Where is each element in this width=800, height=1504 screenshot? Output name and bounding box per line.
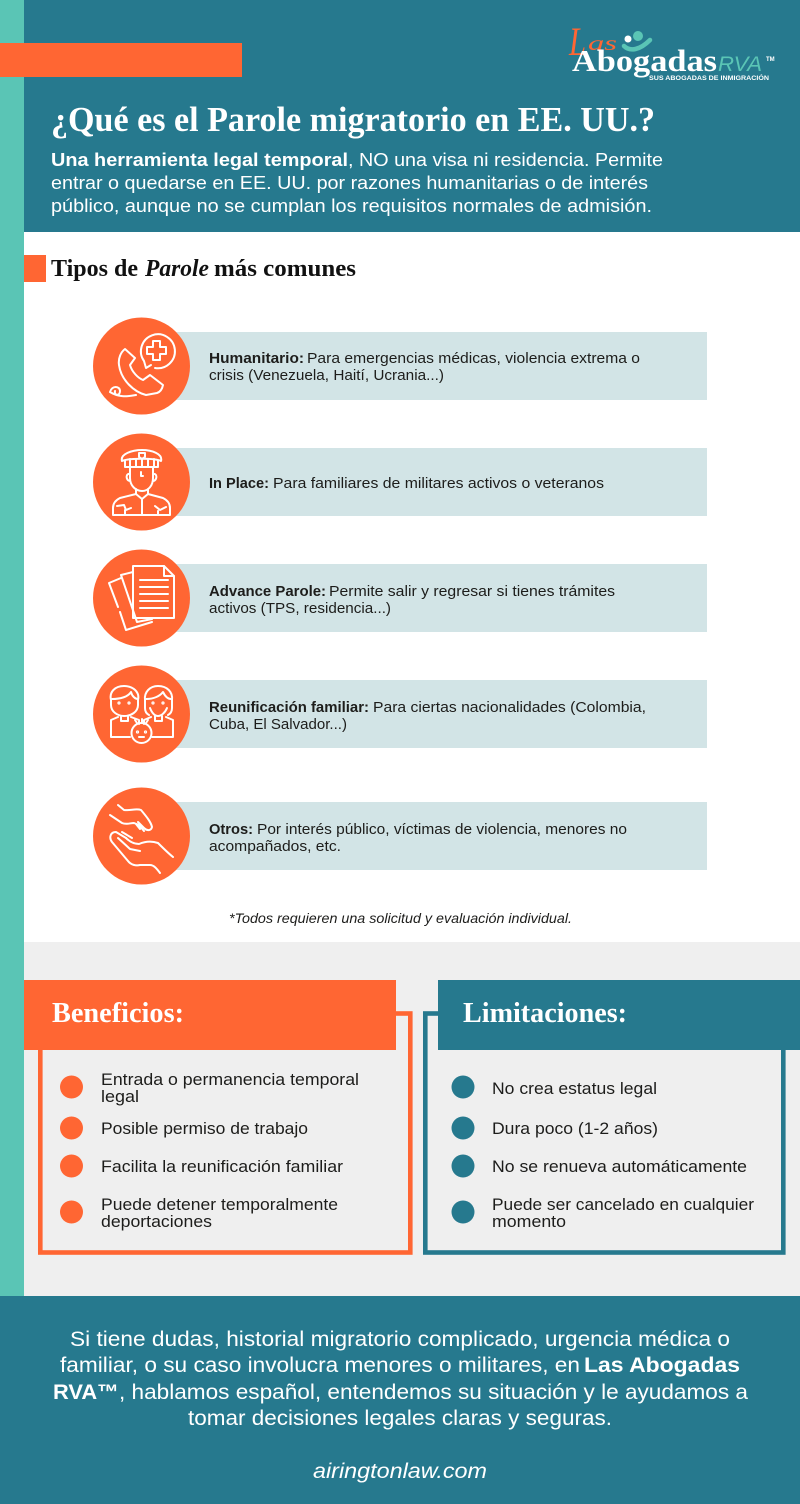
- logo: TM: [766, 57, 775, 63]
- type: otros: Otros:: [209, 822, 253, 838]
- limitations list: No se renueva automáticamente: [492, 1157, 747, 1176]
- orange accent bar: [0, 43, 242, 77]
- logo: L: [568, 19, 586, 64]
- type: advance parole: [93, 550, 707, 646]
- type: otros: acompañados, etc.: [209, 839, 341, 855]
- footer message: Si tiene dudas, historial migratorio complicado, urgencia médica o: [70, 1328, 730, 1351]
- icon: soldier: [113, 450, 170, 515]
- footer message: familiar, o su caso involucra menores o militares, en: [60, 1354, 580, 1377]
- intro text: Una herramienta legal temporal: [51, 149, 348, 170]
- type: otros: [93, 788, 707, 884]
- website: airingtonlaw.com: [313, 1460, 487, 1483]
- section heading: tipos de parole: [24, 255, 356, 282]
- type: humanitario: Para emergencias médicas, violencia extrema o: [307, 351, 640, 367]
- type: in place: Para familiares de militares activos o veteranos: [273, 476, 604, 492]
- intro text: público, aunque no se cumplan los requisitos normales de admisión.: [51, 195, 652, 216]
- type: otros: Por interés público, víctimas de violencia, menores no: [257, 822, 627, 838]
- logo: as: [588, 31, 617, 55]
- footer message: Las Abogadas: [584, 1354, 740, 1377]
- limitations list: [452, 1076, 754, 1231]
- icon: family: [111, 686, 173, 743]
- footer panel: [0, 1296, 800, 1504]
- intro text: , NO una visa ni residencia. Permite: [348, 149, 663, 170]
- limitations list: Puede ser cancelado en cualquier: [492, 1195, 754, 1214]
- icon: documents: [109, 566, 174, 630]
- type: in place: [93, 434, 707, 530]
- panel: beneficios: [24, 980, 410, 1252]
- benefits list: [60, 1070, 359, 1231]
- footer message: tomar decisiones legales claras y seguras.: [188, 1407, 612, 1430]
- limitations list: momento: [492, 1212, 566, 1231]
- type: humanitario: crisis (Venezuela, Haití, Ucrania...): [209, 368, 444, 384]
- left accent strip: [0, 0, 24, 1296]
- benefits list: Posible permiso de trabajo: [101, 1119, 308, 1138]
- limitations list: No crea estatus legal: [492, 1079, 657, 1098]
- footer message: RVA™: [53, 1381, 119, 1404]
- logo: [568, 19, 775, 82]
- icon: hands: [110, 805, 173, 873]
- heading: beneficios: Beneficios:: [52, 998, 184, 1029]
- type: reunificacion familiar: Cuba, El Salvador...): [209, 717, 347, 733]
- benefits list: Puede detener temporalmente: [101, 1195, 338, 1214]
- section heading: tipos de parole: Tipos de: [51, 256, 138, 282]
- footer message: [53, 1328, 748, 1430]
- section heading: tipos de parole: más comunes: [214, 256, 356, 282]
- benefits list: Entrada o permanencia temporal: [101, 1070, 359, 1089]
- type: reunificacion familiar: [93, 666, 707, 762]
- footer message: , hablamos español, entendemos su situación y le ayudamos a: [119, 1381, 748, 1404]
- type: reunificacion familiar: Para ciertas nacionalidades (Colombia,: [373, 700, 646, 716]
- type: reunificacion familiar: Reunificación familiar:: [209, 700, 369, 716]
- type: in place: In Place:: [209, 476, 269, 492]
- type: advance parole: activos (TPS, residencia...): [209, 601, 391, 617]
- heading: limitaciones: Limitaciones:: [463, 998, 627, 1029]
- panel: limitaciones: [425, 980, 800, 1252]
- intro text: entrar o quedarse en EE. UU. por razones humanitarias o de interés: [51, 172, 648, 193]
- title: ¿Qué es el Parole migratorio en EE. UU.?: [51, 100, 655, 139]
- limitations list: Dura poco (1-2 años): [492, 1119, 658, 1138]
- type: advance parole: Advance Parole:: [209, 584, 326, 600]
- type: advance parole: Permite salir y regresar si tienes trámites: [329, 584, 615, 600]
- logo: RVA: [718, 53, 762, 76]
- comparison section background: [24, 942, 800, 1296]
- benefits list: legal: [101, 1087, 139, 1106]
- logo: SUS ABOGADAS DE INMIGRACIÓN: [649, 73, 769, 82]
- icon: phone with medical cross: [110, 334, 175, 396]
- type: humanitario: Humanitario:: [209, 351, 304, 367]
- benefits list: deportaciones: [101, 1212, 212, 1231]
- type: humanitario: [93, 318, 707, 414]
- section heading: tipos de parole: Parole: [144, 256, 209, 282]
- intro text: [51, 149, 663, 216]
- benefits list: Facilita la reunificación familiar: [101, 1157, 343, 1176]
- footnote: *Todos requieren una solicitud y evaluación individual.: [229, 910, 572, 926]
- logo: Abogadas: [572, 43, 717, 78]
